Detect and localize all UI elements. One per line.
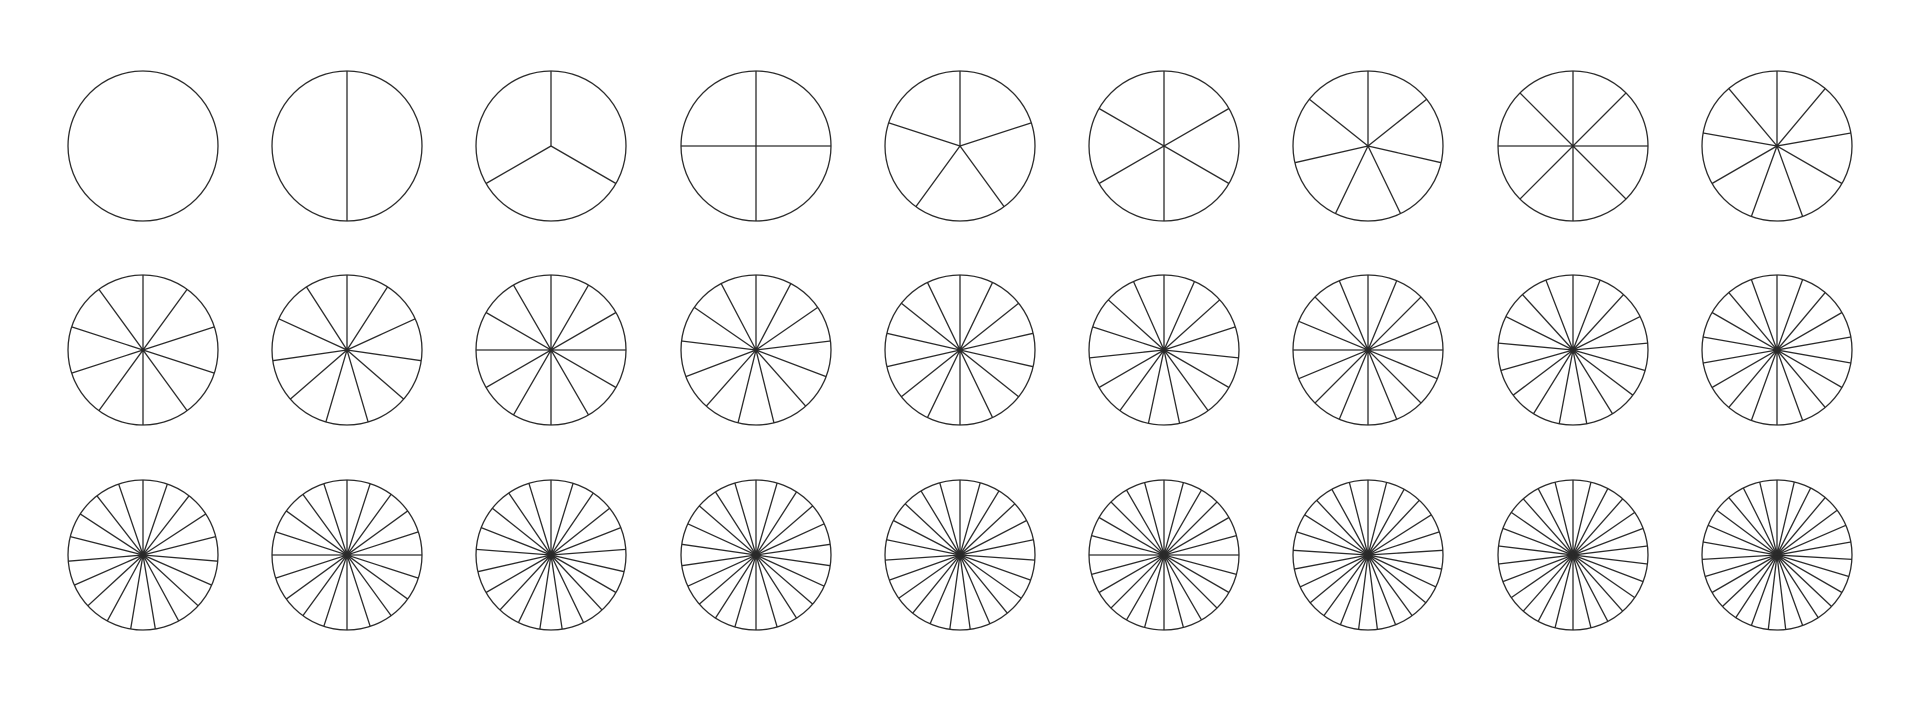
circle: 18 segments [1702, 275, 1852, 425]
circle: 8 segments [1498, 71, 1648, 221]
circle: 16 segments [1293, 275, 1443, 425]
circle: 4 segments [681, 71, 831, 221]
circle: 5 segments [885, 71, 1035, 221]
circle: 13 segments [681, 275, 831, 425]
circle: 26 segments [1498, 480, 1648, 630]
circle: 7 segments [1293, 71, 1443, 221]
circle: 20 segments [272, 480, 422, 630]
circle: 17 segments [1498, 275, 1648, 425]
circle: 21 segments [476, 480, 626, 630]
circle: 19 segments [68, 480, 218, 630]
circle: 12 segments [476, 275, 626, 425]
circle: 15 segments [1089, 275, 1239, 425]
circle: 24 segments [1089, 480, 1239, 630]
circle: 1 segment [68, 71, 218, 221]
circle: 23 segments [885, 480, 1035, 630]
circle: 9 segments [1702, 71, 1852, 221]
circle: 2 segments [272, 71, 422, 221]
circle: 6 segments [1089, 71, 1239, 221]
circle: 27 segments [1702, 480, 1852, 630]
circle: 14 segments [885, 275, 1035, 425]
circle: 3 segments [476, 71, 626, 221]
circle: 25 segments [1293, 480, 1443, 630]
circle: 11 segments [272, 275, 422, 425]
circle: 10 segments [68, 275, 218, 425]
circle: 22 segments [681, 480, 831, 630]
